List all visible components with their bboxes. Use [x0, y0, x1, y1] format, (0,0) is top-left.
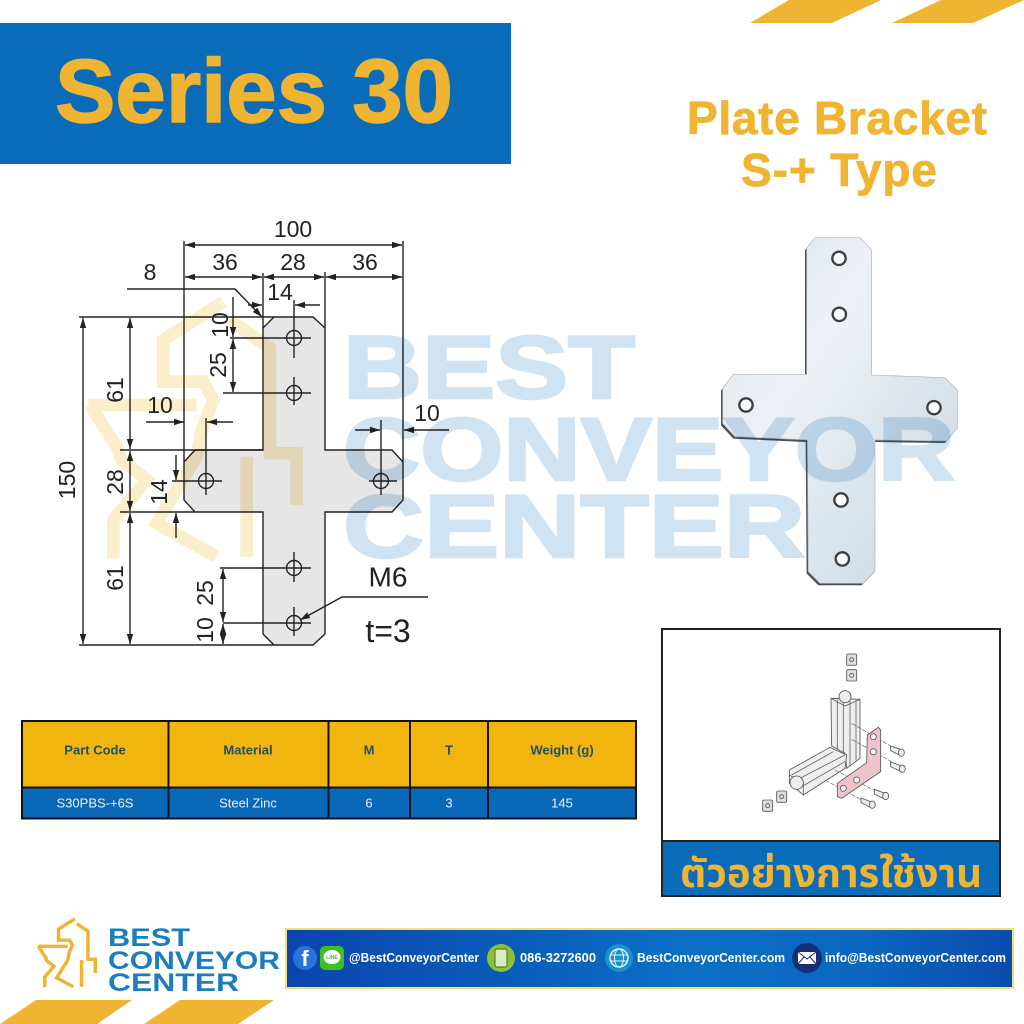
dimension labels: 36	[212, 249, 238, 275]
table row: 3	[445, 796, 453, 810]
icon: facebook	[293, 946, 317, 971]
watermark text	[343, 317, 955, 576]
dimension labels: 28	[102, 469, 128, 495]
logo wordmark: CENTER	[108, 969, 239, 997]
table row: Steel Zinc	[219, 796, 277, 810]
dimension labels: 36	[352, 249, 378, 275]
Thai caption band: ตัวอย่างการใช้งาน	[680, 851, 982, 896]
dimension labels: 100	[274, 216, 312, 242]
logo wordmark: CONVEYOR	[108, 947, 280, 975]
dimension labels: 25	[192, 580, 218, 606]
watermark text: CONVEYOR	[343, 399, 955, 499]
dimension labels: 25	[205, 352, 231, 378]
application example panel	[662, 629, 1000, 896]
handle text: @BestConveyorCenter	[349, 951, 479, 965]
L bracket	[837, 727, 881, 798]
dimension labels: 28	[280, 249, 306, 275]
icon: globe	[605, 944, 633, 972]
dimension labels: 150	[54, 461, 80, 499]
dimension labels: 61	[102, 565, 128, 591]
icon: phone	[487, 944, 515, 972]
technical drawing of bracket	[54, 216, 449, 649]
icon: LINE: LINE	[326, 955, 338, 961]
product photo: zinc cross plate	[721, 238, 957, 585]
website: BestConveyorCenter.com	[637, 951, 785, 965]
product title	[687, 92, 987, 196]
footer logo	[38, 919, 280, 997]
logo mark	[38, 919, 95, 987]
phone number: 086-3272600	[520, 951, 596, 965]
dimension labels: 14	[267, 279, 293, 305]
table row: 145	[551, 796, 573, 810]
product title: Plate Bracket	[687, 92, 987, 144]
icon: LINE	[320, 946, 344, 970]
table header: M	[364, 742, 374, 758]
horizontal dimensions	[185, 244, 402, 246]
icon: facebook: f	[301, 946, 309, 971]
fixing lines	[825, 723, 892, 800]
screws	[861, 746, 905, 808]
watermark logo	[88, 302, 297, 558]
M6 leader	[300, 597, 428, 620]
vertical profile	[831, 698, 860, 768]
vertical dimensions	[82, 318, 84, 644]
logo wordmark	[108, 924, 280, 997]
table header: Material	[223, 742, 273, 758]
watermark text: CENTER	[343, 476, 805, 576]
table row: S30PBS-+6S	[57, 796, 134, 810]
contact bar	[286, 929, 1013, 988]
dimension labels: 10	[147, 392, 173, 418]
top corner stripes	[750, 0, 1024, 23]
table header	[64, 742, 594, 758]
table row	[57, 796, 573, 810]
icon: mail	[792, 943, 822, 973]
email: info@BestConveyorCenter.com	[825, 951, 1006, 965]
title: Series 30: Series 30	[55, 42, 453, 142]
assembly illustration	[763, 654, 905, 811]
specification table	[21, 720, 637, 819]
dimension labels: 8	[144, 259, 156, 285]
header banner	[0, 23, 511, 164]
nuts	[763, 654, 857, 811]
dimension labels: 14	[146, 479, 172, 505]
extension lines	[79, 241, 403, 645]
dimension labels: 10	[414, 400, 440, 426]
table header: Part Code	[64, 742, 126, 758]
dimension labels: 61	[102, 377, 128, 403]
watermark: logo and company name	[88, 302, 955, 576]
hole centres	[172, 300, 397, 636]
dimension labels: 10	[207, 312, 233, 338]
dimension labels: 10	[192, 617, 218, 643]
dimension labels: M6	[369, 562, 407, 592]
dimension labels	[54, 216, 440, 649]
logo wordmark: BEST	[108, 924, 190, 952]
table header: Weight (g)	[530, 742, 594, 758]
plate outline	[184, 317, 403, 645]
table row: 6	[365, 796, 373, 810]
dimension labels: t=3	[365, 613, 411, 649]
bottom stripes	[0, 1000, 274, 1024]
horizontal profile	[789, 747, 847, 795]
table header: T	[445, 742, 453, 758]
product title: S-+ Type	[741, 144, 937, 196]
watermark text: BEST	[343, 317, 635, 417]
